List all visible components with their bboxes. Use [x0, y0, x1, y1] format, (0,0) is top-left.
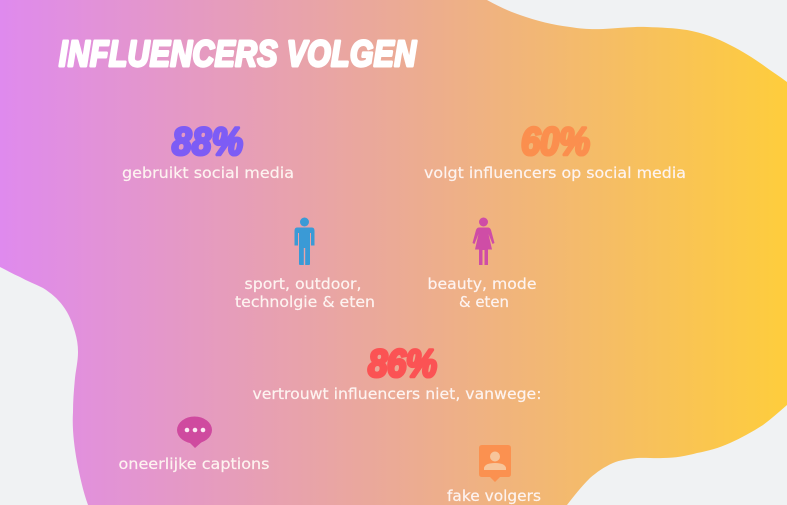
label: fake volgers: fake volgers [447, 487, 541, 505]
icon: woman [472, 218, 494, 265]
stat: 86%: 86% [368, 342, 437, 385]
icon: man [294, 218, 314, 265]
icon: speech bubble [177, 416, 212, 448]
label: men's interests: sport, outdoor, [244, 275, 362, 293]
icon: profile pin [479, 445, 511, 482]
label: volgt influencers op social media: volgt influencers op social media [424, 164, 686, 182]
stat: 60%: 60% [521, 120, 590, 163]
label: women's interests: & eten [459, 293, 509, 311]
label: vertrouwt influencers niet, vanwege: vertrouwt influencers niet, vanwege: [252, 385, 542, 403]
title: INFLUENCERS VOLGEN [59, 34, 417, 75]
label: oneerlijke captions: oneerlijke captions [118, 455, 270, 473]
label: men's interests [235, 275, 375, 311]
label: gebruikt social media: gebruikt social media [122, 164, 294, 182]
label: women's interests: beauty, mode [428, 275, 536, 293]
label: women's interests [428, 275, 536, 311]
label: men's interests: technolgie & eten [235, 293, 375, 311]
stat: 88%: 88% [172, 120, 243, 163]
